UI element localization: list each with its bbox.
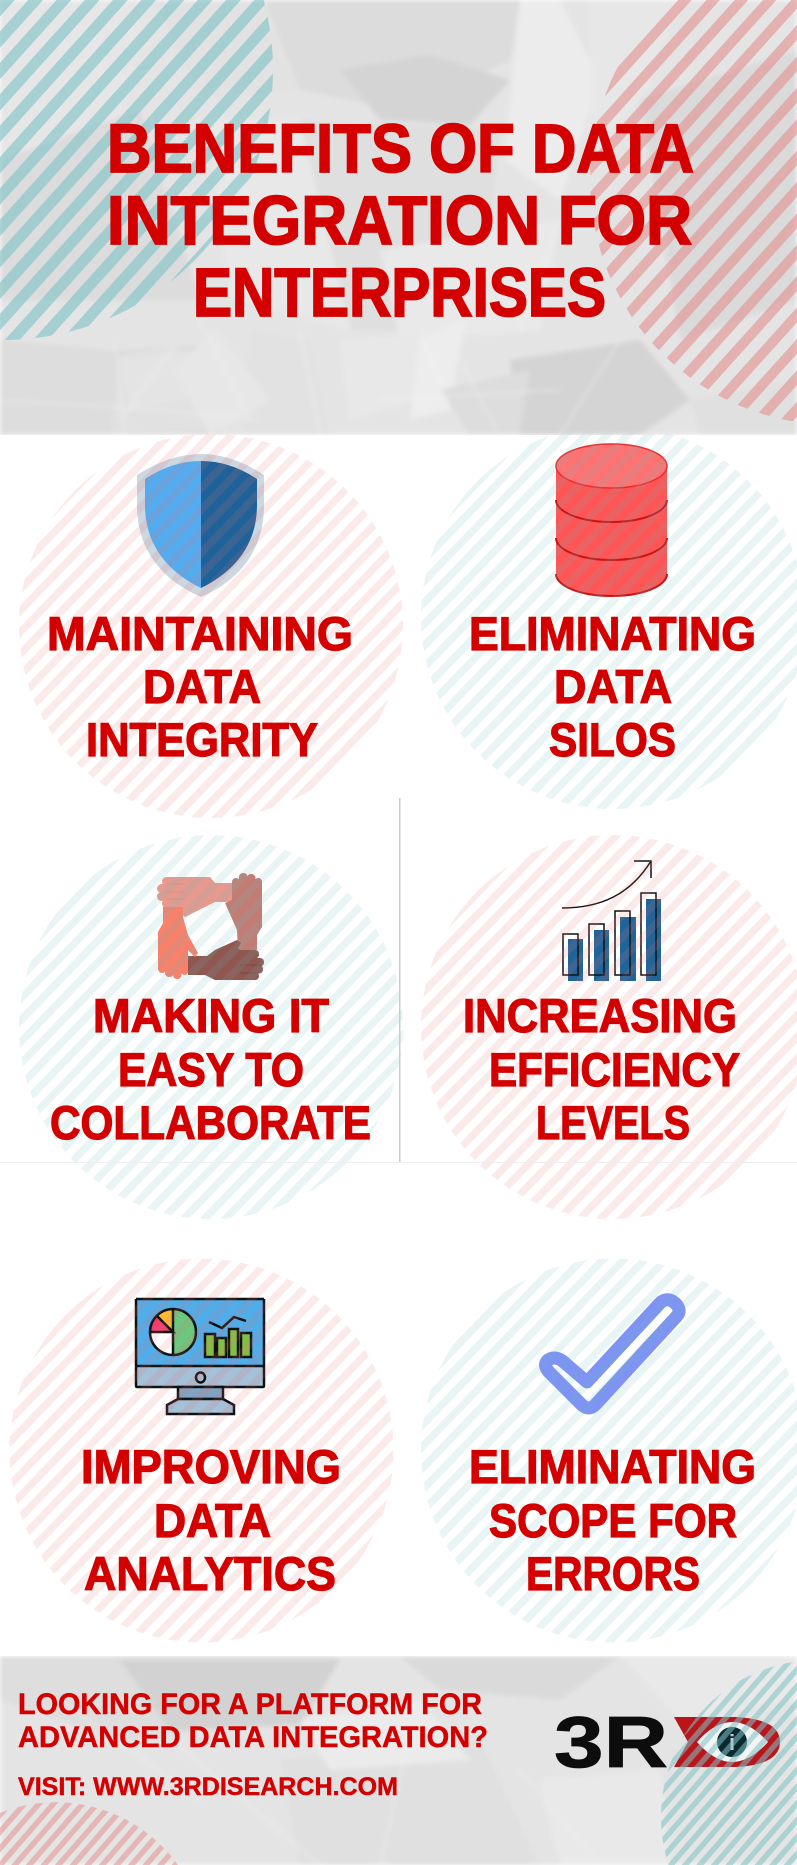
crumpled paper background <box>0 1656 797 1865</box>
striped circle <box>19 835 403 1219</box>
label: EFFICIENCY <box>489 1043 740 1096</box>
label: MAINTAINING <box>47 607 353 660</box>
panel: header <box>0 0 797 435</box>
label: INTEGRITY <box>86 713 318 766</box>
label <box>469 1440 756 1600</box>
label: DATA <box>554 660 672 713</box>
icon: monitor dashboard <box>136 1299 264 1414</box>
label: ELIMINATING <box>469 607 756 660</box>
cta text: VISIT: WWW.3RDISEARCH.COM <box>18 1773 398 1801</box>
icon: rising bar chart <box>562 861 661 981</box>
panel: eliminating data silos <box>421 425 797 809</box>
title: INTEGRATION FOR <box>107 182 692 259</box>
panel: making it easy to collaborate <box>19 835 403 1219</box>
striped circle <box>10 1258 394 1642</box>
label: SILOS <box>549 713 676 766</box>
striped circle <box>421 835 797 1219</box>
striped circle <box>421 425 797 809</box>
label: IMPROVING <box>81 1440 341 1493</box>
label: SCOPE FOR <box>489 1494 737 1547</box>
icon: shield <box>137 454 264 597</box>
label: ANALYTICS <box>84 1547 336 1600</box>
icon: database <box>556 444 667 596</box>
label <box>463 989 740 1149</box>
crumpled paper background <box>0 0 797 435</box>
striped teal circle <box>661 1661 797 1865</box>
label: MAKING IT <box>93 989 329 1042</box>
striped circle <box>421 1258 797 1642</box>
panel: eliminating scope for errors <box>421 1258 797 1642</box>
label: DATA <box>154 1494 271 1547</box>
striped teal circle <box>0 0 273 340</box>
icon: check mark <box>546 1300 679 1408</box>
label: DATA <box>143 660 261 713</box>
label <box>469 607 756 766</box>
label: EASY TO <box>118 1043 304 1096</box>
striped pink circle <box>590 0 797 425</box>
panel: improving data analytics <box>10 1258 394 1642</box>
label: ERRORS <box>526 1547 700 1600</box>
striped circle <box>19 434 403 818</box>
logo: 3RD eye: 3R <box>554 1703 668 1783</box>
cta text: ADVANCED DATA INTEGRATION? <box>18 1721 488 1754</box>
label: INCREASING <box>463 989 737 1042</box>
label: ELIMINATING <box>469 1440 756 1493</box>
title <box>110 122 694 318</box>
label <box>50 989 371 1149</box>
panel: maintaining data integrity <box>19 434 403 818</box>
icon: joined hands <box>157 873 264 980</box>
logo: 3RD eye <box>556 1716 780 1768</box>
cta text: LOOKING FOR A PLATFORM FOR <box>18 1688 482 1721</box>
panel: footer <box>0 1656 797 1865</box>
logo: 3RD eye: i <box>729 1730 735 1755</box>
striped pink circle <box>0 1802 178 1865</box>
label: LEVELS <box>536 1096 690 1149</box>
label <box>81 1440 341 1600</box>
panel: increasing efficiency levels <box>421 835 797 1219</box>
label: COLLABORATE <box>50 1096 371 1149</box>
label <box>47 607 353 766</box>
title: ENTERPRISES <box>193 254 606 331</box>
title: BENEFITS OF DATA <box>107 110 694 187</box>
cta text <box>18 1688 488 1801</box>
